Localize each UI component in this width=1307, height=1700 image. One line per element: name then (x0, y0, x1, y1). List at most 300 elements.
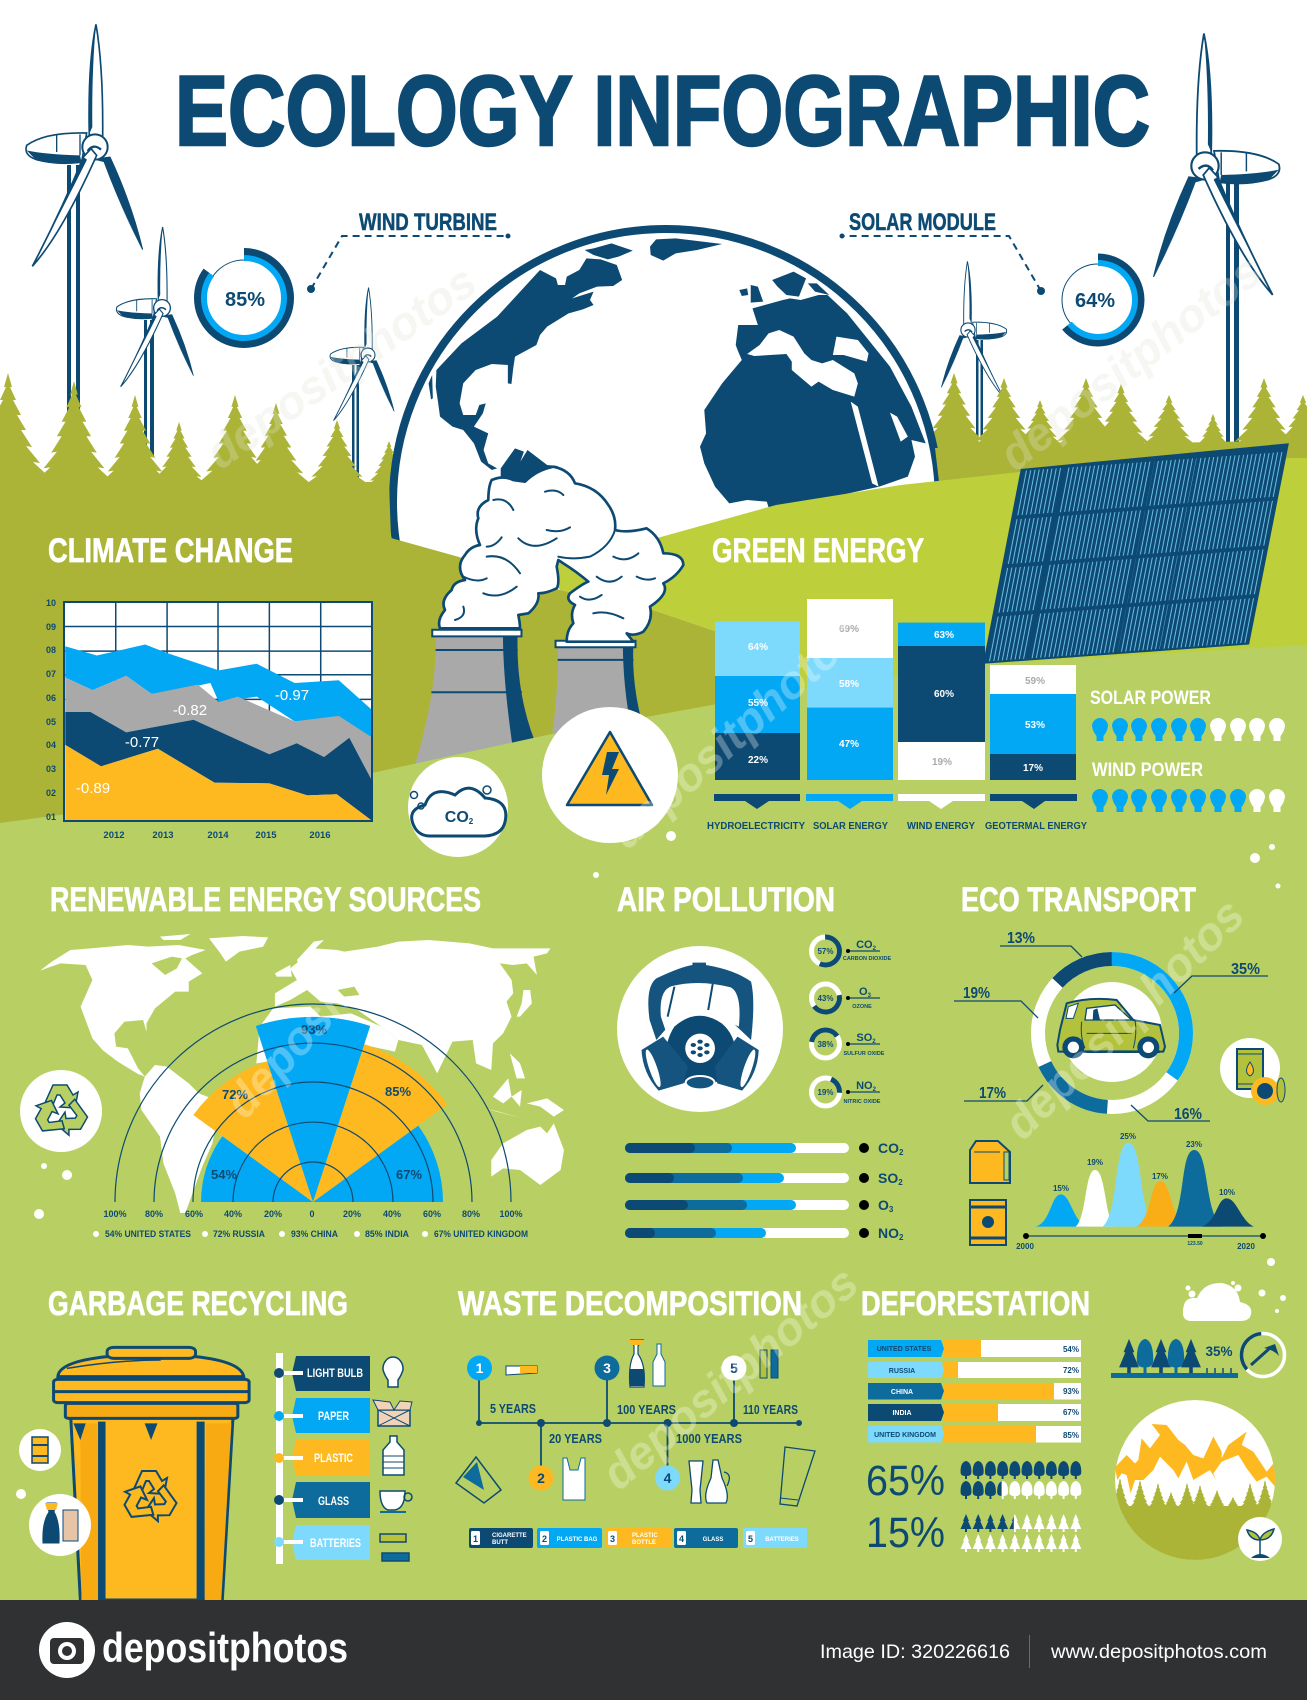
legend chip 1: BUTT (492, 1540, 508, 1546)
time axis: 2000 (1016, 1242, 1034, 1251)
bar pointers (714, 794, 1077, 809)
watermark overlay: depositphotos (196, 255, 486, 479)
world map (40, 934, 564, 1213)
wedge labels: 67% (396, 1167, 422, 1182)
radar legend: 85% INDIA (365, 1229, 409, 1239)
north america (436, 258, 622, 470)
bar labels: WIND ENERGY (907, 821, 975, 832)
bar: hydroelectricity (715, 622, 800, 780)
time axis: 123.50 (1187, 1241, 1203, 1247)
dashed leader (311, 236, 508, 289)
icon: cup (380, 1491, 412, 1512)
x axis labels: 2013 (152, 830, 174, 841)
olive ground right (935, 440, 1307, 490)
progress bar O3 (625, 1197, 894, 1214)
green energy hill (540, 458, 1307, 692)
panel: eco transport (954, 881, 1285, 1251)
value labels: -0.77 (125, 734, 159, 751)
icon: biofuel barrel (1220, 1038, 1285, 1105)
britain (751, 285, 763, 303)
icon: cigarette (506, 1366, 537, 1375)
japan (517, 990, 532, 1017)
legend chip 3: PLASTIC (632, 1533, 658, 1539)
south america top (501, 448, 558, 487)
watermark overlay: depositphotos (989, 244, 1271, 480)
bar: wind energy (898, 623, 985, 780)
progress bar O3: 3 (889, 1205, 894, 1214)
chart areas (64, 602, 372, 821)
turbine rotor 2 (116, 227, 193, 387)
ring callouts: 16% (1174, 1106, 1202, 1123)
row india: INDIA (892, 1410, 912, 1417)
y axis labels: 05 (46, 717, 56, 727)
icon: cardboard box (373, 1400, 412, 1426)
mountain chart: 17% (1152, 1172, 1168, 1181)
australia (491, 1123, 564, 1185)
solar power label: SOLAR POWER (1090, 688, 1211, 709)
heading: DEFORESTATION (861, 1285, 1090, 1323)
bar labels: GEOTERMAL ENERGY (985, 821, 1087, 832)
arctic island (160, 934, 190, 940)
small donut SO2: SULFUR OXIDE (844, 1051, 885, 1057)
icon: batteries small (760, 1350, 778, 1378)
icon: gas mask (617, 946, 783, 1112)
panel: climate change (46, 532, 372, 841)
mountain chart: 19% (1087, 1158, 1103, 1167)
forest left (0, 373, 419, 491)
small donut NO2: 19% (817, 1088, 834, 1097)
row russia: 72% (1063, 1366, 1079, 1375)
small west coast island (429, 375, 433, 399)
red sea (851, 402, 879, 487)
icon: crushed cup (456, 1457, 501, 1503)
icon: axe ring (1233, 1325, 1293, 1385)
bar: hydroelectricity: 22% (748, 755, 768, 766)
progress bar CO2: 2 (899, 1148, 904, 1157)
continents (429, 238, 926, 507)
legend chip 5 (743, 1528, 807, 1548)
legend chip 3 (606, 1528, 671, 1548)
ring callouts: 19% (963, 985, 990, 1002)
x axis labels: 2012 (103, 830, 125, 841)
x axis labels: 2014 (207, 830, 229, 841)
turbine tower large right (1226, 180, 1239, 450)
ring callouts (954, 930, 1268, 1123)
row russia: RUSSIA (889, 1368, 915, 1375)
step 3 (594, 1356, 620, 1380)
logo (39, 1622, 95, 1678)
wind power label: WIND POWER (1092, 760, 1203, 781)
lower light green ground (0, 645, 1307, 1600)
leader dots (307, 234, 510, 293)
north america (40, 945, 206, 1077)
y axis labels: 02 (46, 788, 56, 798)
cooling tower right (547, 641, 644, 768)
logo wordmark: depositphotos (102, 1624, 348, 1671)
row united kingdom: 85% (1063, 1431, 1079, 1440)
smoke creases (455, 491, 655, 620)
wedge 93% (256, 1017, 370, 1202)
wedge 72% (193, 1061, 313, 1202)
panel: garbage recycling (16, 1285, 412, 1600)
forest fire illustration (1115, 1400, 1275, 1560)
bar: solar energy: 69% (839, 624, 859, 635)
heading: RENEWABLE ENERGY SOURCES (50, 881, 481, 919)
turbine tower small left (352, 365, 359, 485)
radar axis labels: 20% (343, 1209, 361, 1219)
small donut NO2: NO (856, 1080, 873, 1092)
row russia (868, 1362, 1081, 1378)
eurasia (275, 940, 550, 1073)
wind turbines background (26, 24, 1280, 485)
turbine rotor 1 (26, 24, 143, 266)
wedge labels: 54% (211, 1167, 237, 1182)
small donut O3: 3 (868, 993, 872, 999)
image id: Image ID: 320226616 (820, 1641, 1010, 1663)
footer divider (1029, 1635, 1030, 1668)
scandinavia (297, 940, 337, 968)
wedge labels (211, 1022, 422, 1182)
step 4 (655, 1466, 680, 1490)
label: WIND TURBINE (359, 209, 497, 236)
step 2: 2 (537, 1470, 545, 1486)
forest right (909, 373, 1307, 459)
legend chip 1: 1 (473, 1534, 478, 1544)
row united states (868, 1340, 1081, 1357)
decorative dots (34, 831, 1280, 1266)
heading: ECO TRANSPORT (961, 881, 1196, 919)
watermark overlay (196, 244, 1271, 1499)
mountain chart: 15% (1053, 1184, 1069, 1193)
icon: co2 cloud (408, 757, 508, 857)
y axis labels: 07 (46, 669, 56, 679)
step 5: 5 (730, 1360, 738, 1376)
tag: paper: PAPER (318, 1409, 349, 1423)
small donut NO2: 2 (873, 1087, 877, 1093)
legend chip 4: GLASS (703, 1537, 723, 1543)
bar: hydroelectricity: 64% (748, 642, 768, 653)
time axis (1016, 1233, 1266, 1251)
year labels: 100 YEARS (617, 1402, 676, 1417)
row united states: 54% (1063, 1345, 1079, 1354)
turbine rotor 4 (1154, 34, 1280, 295)
legend chip 5: BATTERIES (765, 1537, 799, 1543)
legend chip 2 (537, 1528, 602, 1548)
wedge 67% (313, 1126, 443, 1202)
mountain chart: 25% (1120, 1132, 1136, 1141)
progress bar NO2 (625, 1225, 904, 1242)
small donut CO2: 2 (873, 946, 877, 952)
bin recycling symbol (119, 1471, 181, 1525)
row china: CHINA (891, 1389, 913, 1396)
callout: wind turbine (198, 209, 510, 344)
footer bar (0, 1600, 1307, 1700)
tag: light bulb: LIGHT BULB (307, 1366, 363, 1380)
progress bar SO2: 2 (898, 1178, 903, 1187)
radar axis labels: 20% (264, 1209, 282, 1219)
icon: jug (706, 1460, 729, 1503)
icon: bottles bubble (29, 1494, 91, 1556)
tag: glass (274, 1482, 370, 1518)
recycling bin (54, 1347, 249, 1600)
progress bar CO2: CO (878, 1140, 899, 1156)
year labels: 1000 YEARS (676, 1431, 742, 1446)
small donut NO2 (807, 1073, 881, 1111)
arctic islands (585, 243, 633, 259)
ring chart (1007, 928, 1217, 1138)
tag: batteries (274, 1525, 370, 1560)
progress bar NO2: 2 (899, 1233, 904, 1242)
step 5 (722, 1356, 746, 1380)
radar legend: 67% UNITED KINGDOM (434, 1229, 528, 1239)
chart background (64, 602, 372, 821)
recycling list spine (276, 1353, 283, 1564)
heading: GREEN ENERGY (712, 532, 924, 570)
watermark overlay: depositphotos (993, 888, 1254, 1149)
step 4: 4 (664, 1470, 672, 1486)
step 2 (528, 1466, 554, 1490)
radar axis labels: 60% (423, 1209, 441, 1219)
radar legend (93, 1229, 528, 1239)
ring callouts: 13% (1007, 930, 1035, 947)
website: www.depositphotos.com (1050, 1641, 1267, 1663)
greenland (650, 238, 722, 261)
mini forest (1111, 1339, 1238, 1378)
step 3: 3 (603, 1360, 611, 1376)
legend chip 5: 5 (748, 1534, 753, 1544)
heading: GARBAGE RECYCLING (48, 1285, 348, 1323)
small donut O3: 43% (817, 994, 834, 1003)
bar labels: HYDROELECTRICITY (707, 821, 805, 832)
tag: batteries: BATTERIES (310, 1536, 361, 1550)
turbine tower small right (976, 340, 983, 440)
row united kingdom (868, 1426, 1081, 1442)
ring callouts: 17% (979, 1085, 1006, 1102)
y axis labels (46, 598, 56, 822)
small donut CO2 (812, 937, 891, 965)
stat 35%: 35% (1205, 1344, 1233, 1359)
bar labels (707, 821, 1087, 832)
mediterranean (747, 330, 858, 397)
britain (275, 965, 292, 977)
tag: glass: GLASS (318, 1494, 349, 1508)
donut 64%: 64% (1075, 290, 1115, 312)
icon: sprout (1238, 1517, 1282, 1561)
turbine rotor 5 (941, 261, 1007, 397)
mountain chart: 10% (1219, 1188, 1235, 1197)
smoke plumes (439, 467, 683, 642)
donut 64% (1055, 257, 1141, 343)
radar axis labels: 100% (103, 1209, 127, 1219)
icon: bulb (383, 1357, 403, 1387)
year labels: 110 YEARS (743, 1402, 798, 1417)
icon: electrical warning (542, 707, 678, 843)
icon: barrel bubble (19, 1429, 61, 1471)
small donut SO2: SO (856, 1032, 872, 1044)
panel: renewable energy sources (20, 881, 564, 1239)
globe disc (393, 229, 939, 775)
row india: 67% (1063, 1408, 1079, 1417)
year labels (490, 1401, 798, 1446)
small donut O3: OZONE (852, 1004, 872, 1010)
radar chart (93, 1004, 528, 1239)
step 1: 1 (476, 1360, 484, 1376)
bar: geothermal energy: 17% (1023, 763, 1043, 774)
pictogram pine trees (960, 1514, 1081, 1552)
radar axis labels (103, 1209, 523, 1219)
wind power bulbs (1092, 789, 1285, 812)
progress bar CO2 (625, 1140, 904, 1157)
ring callouts: 35% (1231, 961, 1260, 978)
row india (868, 1404, 1081, 1421)
mountain chart (1016, 1132, 1266, 1251)
legend chip 2: 2 (542, 1534, 547, 1544)
step 1 (467, 1356, 492, 1380)
bar: solar energy: 47% (839, 739, 859, 750)
europe africa asia (700, 295, 926, 507)
tag: light bulb (274, 1356, 370, 1391)
small donut O3 (809, 982, 880, 1014)
solar power bulbs (1092, 718, 1285, 741)
watermark overlay: depositphotos (599, 608, 869, 858)
radar legend: 93% CHINA (291, 1229, 338, 1239)
cooling towers (410, 630, 644, 779)
icon: recycling (20, 1070, 102, 1152)
icon: co2 cloud: CO (445, 809, 469, 826)
south america (140, 1065, 217, 1213)
panel: air pollution (617, 881, 904, 1242)
wedge 54% (201, 1136, 313, 1202)
black sea (337, 987, 359, 997)
north europe strip (808, 283, 829, 295)
y axis labels: 04 (46, 740, 56, 750)
radar axis labels: 40% (383, 1209, 401, 1219)
panel: deforestation (861, 1281, 1293, 1566)
ireland (739, 288, 748, 296)
y axis labels: 03 (46, 764, 56, 774)
tag: paper (274, 1398, 370, 1433)
wedge labels: 72% (222, 1087, 248, 1102)
y axis labels: 10 (46, 598, 56, 608)
dashed leader (842, 236, 1041, 291)
area chart (46, 598, 372, 841)
progress bar SO2: SO (878, 1170, 898, 1186)
icon: plastic bag (563, 1458, 585, 1500)
scandinavia (772, 272, 806, 297)
legend chip 1: CIGARETTE (492, 1533, 527, 1539)
row china: 93% (1063, 1387, 1079, 1396)
donut 85%: 85% (225, 289, 265, 311)
greenland (209, 936, 268, 962)
icon: tube (780, 1447, 815, 1506)
value labels: -0.82 (173, 702, 207, 719)
label: SOLAR MODULE (849, 209, 996, 236)
radar legend: 54% UNITED STATES (105, 1229, 191, 1239)
tag: plastic: PLASTIC (314, 1451, 353, 1465)
chart frame (64, 602, 372, 821)
row united states: UNITED STATES (877, 1346, 932, 1353)
bar: geothermal energy: 59% (1025, 676, 1045, 687)
row china (868, 1383, 1081, 1400)
small donut SO2: 2 (872, 1039, 876, 1045)
bar: geothermal energy: 53% (1025, 720, 1045, 731)
wedge 85% (313, 1044, 447, 1202)
tag: plastic (274, 1440, 370, 1476)
watermark overlay: deposit (214, 970, 363, 1127)
radar axis labels: 40% (224, 1209, 242, 1219)
legend chip 2: PLASTIC BAG (557, 1537, 598, 1543)
time axis: 2020 (1237, 1242, 1255, 1251)
bar: hydroelectricity: 55% (748, 698, 768, 709)
globe (393, 229, 939, 775)
bar: solar energy: 58% (839, 679, 859, 690)
icon: jerrycan (970, 1141, 1010, 1183)
bar: geothermal energy (990, 665, 1076, 780)
heading: WASTE DECOMPOSITION (458, 1285, 802, 1323)
y axis labels: 01 (46, 812, 56, 822)
small donut NO2: NITRIC OXIDE (844, 1099, 881, 1105)
heading: AIR POLLUTION (617, 881, 835, 919)
value labels (76, 687, 309, 797)
progress bar SO2 (625, 1170, 903, 1187)
radar rings (115, 1004, 511, 1202)
wedge labels: 85% (385, 1084, 411, 1099)
mountain chart: 23% (1186, 1140, 1202, 1149)
bar: wind energy: 63% (934, 630, 954, 641)
value labels: -0.97 (275, 687, 309, 704)
flames (1115, 1424, 1275, 1493)
panel: waste decomposition (456, 1285, 815, 1548)
y axis labels: 06 (46, 693, 56, 703)
bar: wind energy: 19% (932, 757, 952, 768)
turbine rotor 3 (330, 288, 394, 421)
year labels: 5 YEARS (490, 1401, 536, 1416)
africa (256, 1007, 398, 1063)
legend chip 3: 3 (610, 1534, 615, 1544)
stat 15%: 15% (866, 1509, 945, 1557)
icon: broken glass (689, 1461, 703, 1503)
bar: solar energy (807, 599, 893, 780)
radar axis labels: 80% (145, 1209, 163, 1219)
legend chip 4 (674, 1528, 738, 1548)
row united kingdom: UNITED KINGDOM (874, 1432, 936, 1439)
panel: green energy (707, 532, 1285, 832)
y axis labels: 09 (46, 622, 56, 632)
x axis labels: 2015 (255, 830, 277, 841)
black sea (833, 337, 869, 362)
hudson bay (152, 957, 182, 975)
legend chip 3: BOTTLE (632, 1540, 656, 1546)
progress bar NO2: NO (878, 1225, 899, 1241)
icon: co2 cloud: 2 (469, 817, 474, 826)
progress bar O3: O (878, 1197, 889, 1213)
radar axis labels: 100% (499, 1209, 523, 1219)
small donut O3: O (859, 986, 868, 998)
bar: wind energy: 60% (934, 689, 954, 700)
leader dots (840, 234, 1045, 295)
callout: solar module (840, 209, 1141, 343)
icon: radioactive barrel (970, 1200, 1006, 1245)
smoke body (439, 467, 683, 642)
decorative dot (16, 1489, 26, 1499)
panel stripes (986, 450, 1284, 664)
heading: CLIMATE CHANGE (48, 532, 293, 570)
small donut CO2: 57% (817, 947, 834, 956)
y axis labels: 08 (46, 645, 56, 655)
x axis labels (103, 830, 331, 841)
value labels: -0.89 (76, 780, 110, 797)
legend chip 4: 4 (679, 1534, 684, 1544)
